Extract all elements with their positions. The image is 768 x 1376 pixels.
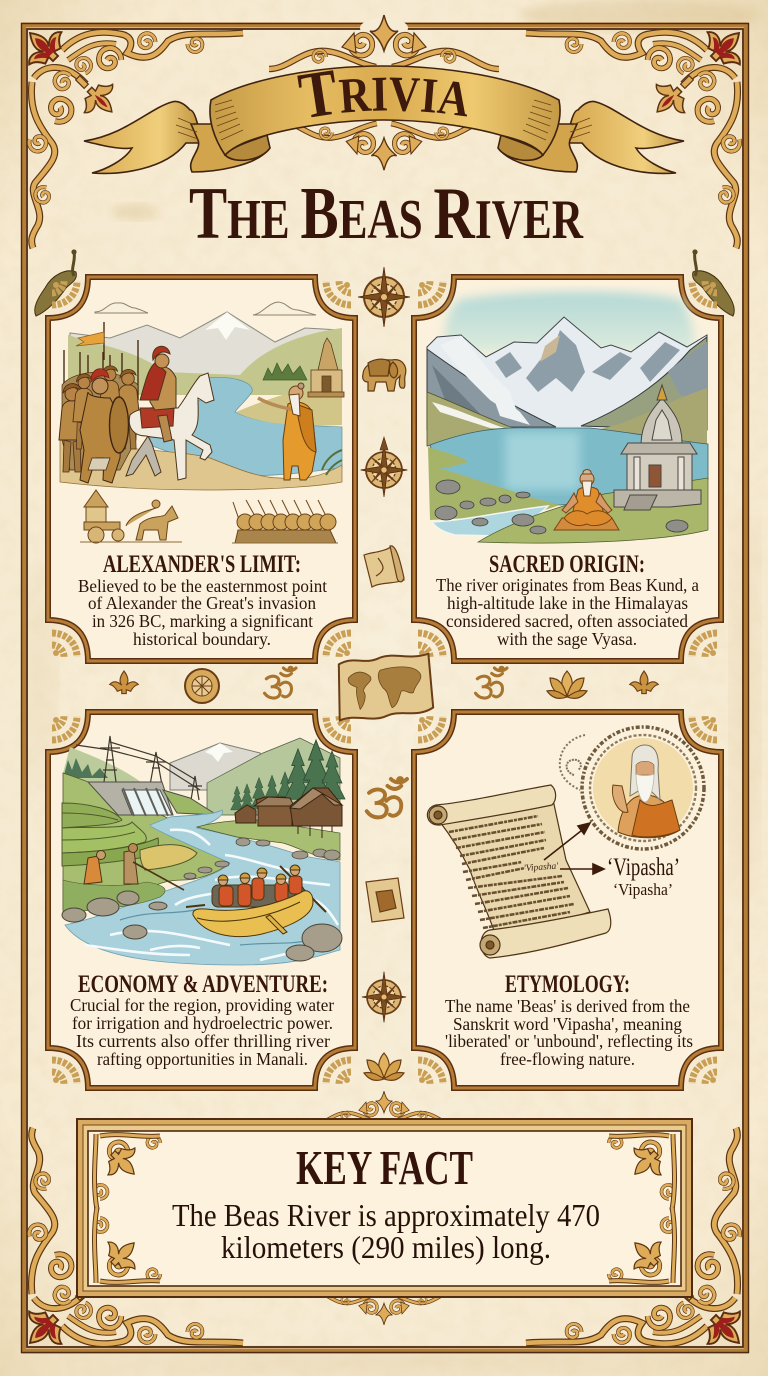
pine forest [230,740,345,810]
body text [70,995,334,1069]
icon: om [264,667,296,698]
icon: big map [336,654,434,720]
icon: om [367,778,407,817]
label: Vipasha [607,854,680,899]
panel: sacred origin [414,277,721,661]
illustration: phalanx [232,500,338,543]
body text [445,996,693,1069]
banner heading: Trivia [297,70,467,118]
key fact text: The Beas River is approximately 470 [172,1197,600,1233]
temple [614,385,701,510]
icon: compass [362,972,406,1022]
raft [186,865,326,937]
heading: ALEXANDER'S LIMIT: [103,551,301,578]
illustration: dam, terraces and rafting [62,736,345,965]
icon: fleur [110,671,138,694]
icon: lotus [547,671,587,698]
notch ornaments [418,716,717,1084]
banner [84,66,684,173]
stones along banks [184,838,340,879]
farmers [84,844,184,890]
ornament below key fact [315,1292,453,1325]
body text: The name 'Beas' is derived from the [445,996,690,1016]
temple [308,338,344,397]
body text: free-flowing nature. [500,1049,635,1069]
body text [436,575,699,649]
icon: om [476,667,507,698]
notch ornaments [52,716,351,1084]
panel: etymology [414,712,721,1088]
body text: Believed to be the easternmost point [78,576,327,596]
divider row of icons [110,654,658,720]
body text: The river originates from Beas Kund, a [436,575,699,595]
body text: Sanskrit word 'Vipasha', meaning [453,1014,682,1034]
icon: right peacock [692,249,734,316]
box corner ornaments [94,1134,675,1283]
body text: 'liberated' or 'unbound', reflecting its [445,1031,693,1051]
lower left bank [63,880,165,912]
illustration: scroll: 'Vipasha' [524,862,560,874]
panel: economy and adventure [48,712,355,1088]
key fact text [172,1197,600,1265]
label: Vipasha: ‘Vipasha’ [613,880,673,899]
pylons [76,736,202,800]
illustration: scroll [427,785,611,958]
center column icons [358,267,410,1080]
illustration: Beas Kund lake and sage [427,292,708,543]
horse and rider [126,346,214,480]
body text: in 326 BC, marking a significant [92,611,313,631]
heading: ETYMOLOGY: [505,971,630,998]
ornament above banner [269,15,499,69]
body text [78,576,327,649]
banner heading: Trivia: TRIVIA [297,70,467,118]
title: THE BEAS RIVER [189,173,583,255]
icon: small scroll [366,878,404,922]
body text: Crucial for the region, providing water [70,995,334,1015]
key fact text: kilometers (290 miles) long. [221,1229,551,1265]
sage [554,470,619,530]
icon: left peacock [35,249,77,316]
left hillside [63,773,230,910]
body text: with the sage Vyasa. [497,629,637,649]
key fact heading: KEY FACT [296,1140,473,1195]
dam [88,782,217,816]
body text: for irrigation and hydroelectric power. [72,1013,333,1033]
notch ornaments [418,281,717,657]
icon: compass [361,437,407,497]
body text: of Alexander the Great's invasion [88,593,316,613]
body text: considered sacred, often associated [446,611,688,631]
ornament below banner [280,122,488,170]
terraces [62,803,197,870]
body text: Its currents also offer thrilling river [76,1031,330,1051]
heading: SACRED ORIGIN: [489,551,645,578]
illustration: Alexander and the sage at the river [59,302,344,490]
river [65,810,340,965]
body text: rafting opportunities in Manali. [97,1049,308,1069]
illustration: chariot [80,490,182,543]
icon: elephant [363,359,406,391]
icon: small map [364,546,404,587]
icon: lotus [364,1053,404,1080]
label: Vipasha: ‘Vipasha’ [607,854,680,881]
body text: historical boundary. [133,629,271,649]
soldiers [59,322,140,483]
icon: compass [358,267,410,327]
sage [258,383,316,480]
rocks [62,891,342,961]
notch ornaments [52,281,351,657]
arrows [544,823,604,874]
icon: medallion [185,669,219,703]
illustration: sage medallion [560,727,704,849]
right bank [197,820,340,860]
icon: fleur [630,671,658,694]
body text: high-altitude lake in the Himalayas [447,593,688,613]
heading: ECONOMY & ADVENTURE: [78,971,328,998]
panel: Alexander's limit [48,277,355,661]
cabins [235,788,342,838]
panel: key fact [77,1119,692,1297]
ornament above key fact [315,1091,453,1124]
